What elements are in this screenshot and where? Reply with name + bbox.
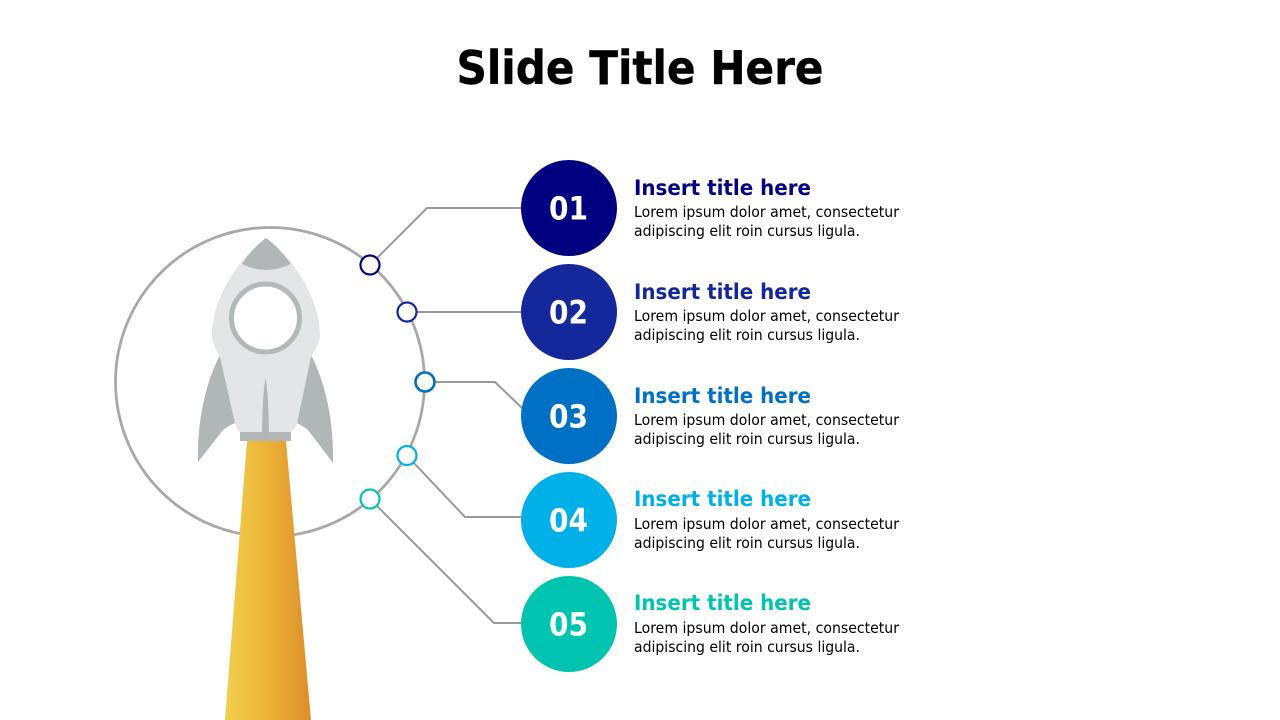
item 1 xyxy=(521,160,900,256)
icon: rocket xyxy=(198,238,333,463)
item 4 heading: Insert title here xyxy=(634,487,811,511)
badge 01 xyxy=(521,160,617,256)
item 5 body: adipiscing elit roin cursus ligula. xyxy=(634,638,860,656)
item 2 body xyxy=(634,307,900,344)
rocket body xyxy=(212,238,320,433)
node 3 xyxy=(416,372,434,392)
connector 1 xyxy=(376,208,524,259)
item 2 xyxy=(521,264,900,360)
item 5 xyxy=(521,576,900,672)
item 1 body: adipiscing elit roin cursus ligula. xyxy=(634,222,860,240)
item 3 body: adipiscing elit roin cursus ligula. xyxy=(634,430,860,448)
item 3 body: Lorem ipsum dolor amet, consectetur xyxy=(634,411,900,429)
item 3 heading: Insert title here xyxy=(634,384,811,408)
rocket right fin xyxy=(297,355,333,463)
badge 03: 03 xyxy=(549,398,588,436)
orbit circle xyxy=(116,228,424,536)
item 2 heading: Insert title here xyxy=(634,280,811,304)
badge 01: 01 xyxy=(549,190,588,228)
node 2 xyxy=(398,302,416,322)
item 4 body: adipiscing elit roin cursus ligula. xyxy=(634,534,860,552)
node 4 xyxy=(398,446,416,465)
rocket porthole xyxy=(232,284,300,352)
item 1 heading: Insert title here xyxy=(634,176,811,200)
item 5 body xyxy=(634,619,900,656)
item 5 body: Lorem ipsum dolor amet, consectetur xyxy=(634,619,900,637)
rocket left fin xyxy=(198,355,235,462)
badge 02: 02 xyxy=(549,294,588,332)
connector 3 xyxy=(434,382,524,410)
item 5 heading: Insert title here xyxy=(634,591,811,615)
item 4 body: Lorem ipsum dolor amet, consectetur xyxy=(634,515,900,533)
connector 5 xyxy=(376,505,524,623)
node 5 xyxy=(360,490,380,508)
item 4 xyxy=(521,472,900,568)
badge 02 xyxy=(521,264,617,360)
item 1 body: Lorem ipsum dolor amet, consectetur xyxy=(634,203,900,221)
item 1 body xyxy=(634,203,900,240)
connector 4 xyxy=(413,462,524,517)
item 3 body xyxy=(634,411,900,448)
rocket nose xyxy=(242,238,291,270)
badge 04 xyxy=(521,472,617,568)
item 2 body: Lorem ipsum dolor amet, consectetur xyxy=(634,307,900,325)
item 2 body: adipiscing elit roin cursus ligula. xyxy=(634,326,860,344)
badge 05: 05 xyxy=(549,606,588,644)
connector 2 xyxy=(416,311,524,313)
badge 05 xyxy=(521,576,617,672)
node 1 xyxy=(360,256,380,274)
item 3 xyxy=(521,368,900,464)
rocket flame xyxy=(225,441,311,720)
item 4 body xyxy=(634,515,900,552)
rocket base xyxy=(240,432,291,441)
badge 03 xyxy=(521,368,617,464)
title: Slide Title Here xyxy=(456,41,824,95)
badge 04: 04 xyxy=(549,502,588,540)
rocket center fin xyxy=(262,378,269,441)
